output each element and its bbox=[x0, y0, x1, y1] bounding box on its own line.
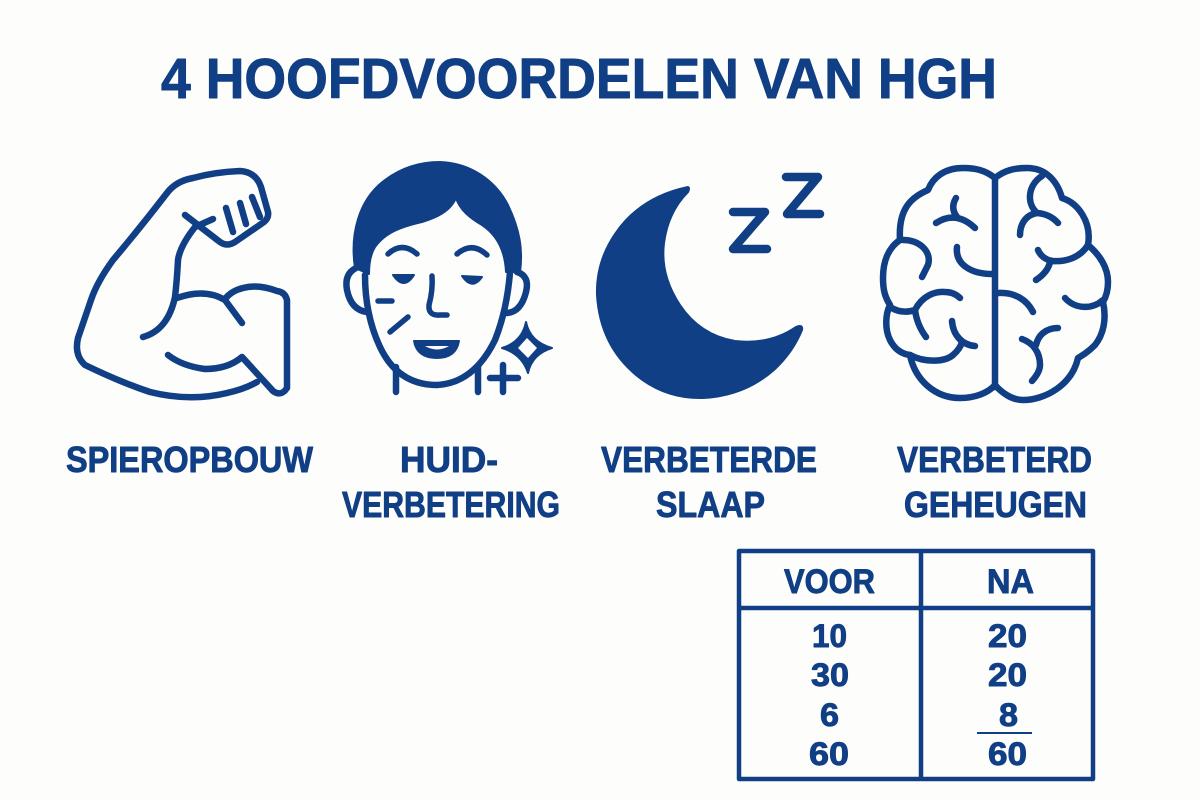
icon: crescent moon with Z letters bbox=[597, 177, 820, 398]
label: Spieropbouw: SPIEROPBOUW bbox=[66, 439, 313, 480]
table header bbox=[784, 563, 1034, 601]
column: na values: 8 bbox=[999, 697, 1018, 733]
table grid bbox=[739, 551, 1093, 779]
label: Huid-verbetering: HUID- bbox=[400, 439, 498, 480]
table header: NA bbox=[987, 563, 1034, 601]
column: voor values: 30 bbox=[811, 657, 849, 693]
eyebrows, nose and wrinkles bbox=[378, 248, 487, 332]
label: Huid-verbetering: VERBETERING bbox=[342, 484, 560, 525]
column: na values: 20 bbox=[988, 657, 1027, 693]
column: voor values bbox=[809, 618, 849, 772]
column: na values: 60 bbox=[988, 736, 1027, 772]
sum line bbox=[977, 732, 1032, 734]
icon: brain bbox=[883, 168, 1108, 400]
icon: face with sparkles bbox=[346, 162, 552, 392]
column: na values: 20 bbox=[988, 618, 1027, 654]
sparkle bbox=[502, 322, 552, 373]
label: Verbeterde slaap: SLAAP bbox=[656, 484, 765, 525]
label: Verbeterd geheugen: VERBETERD bbox=[897, 439, 1092, 480]
column: voor values: 6 bbox=[820, 697, 839, 733]
eyes bbox=[393, 275, 414, 283]
label: Verbeterde slaap: VERBETERDE bbox=[601, 439, 817, 480]
hair bbox=[354, 162, 521, 274]
column: voor values: 10 bbox=[812, 618, 847, 654]
plus bbox=[490, 365, 518, 392]
mouth bbox=[414, 341, 459, 358]
title: 4 HOOFDVOORDELEN VAN HGH bbox=[161, 47, 997, 111]
label: Verbeterde slaap bbox=[601, 439, 817, 525]
face outline and ears bbox=[346, 268, 527, 392]
icon: flexed arm muscle bbox=[77, 171, 287, 397]
column: na values bbox=[988, 618, 1027, 772]
column: voor values: 60 bbox=[809, 736, 849, 772]
label: Huid-verbetering bbox=[342, 439, 560, 525]
label: Verbeterd geheugen: GEHEUGEN bbox=[904, 484, 1087, 525]
label: Verbeterd geheugen bbox=[897, 439, 1092, 525]
table header: VOOR bbox=[784, 563, 875, 601]
table: voor / na bbox=[739, 551, 1093, 779]
